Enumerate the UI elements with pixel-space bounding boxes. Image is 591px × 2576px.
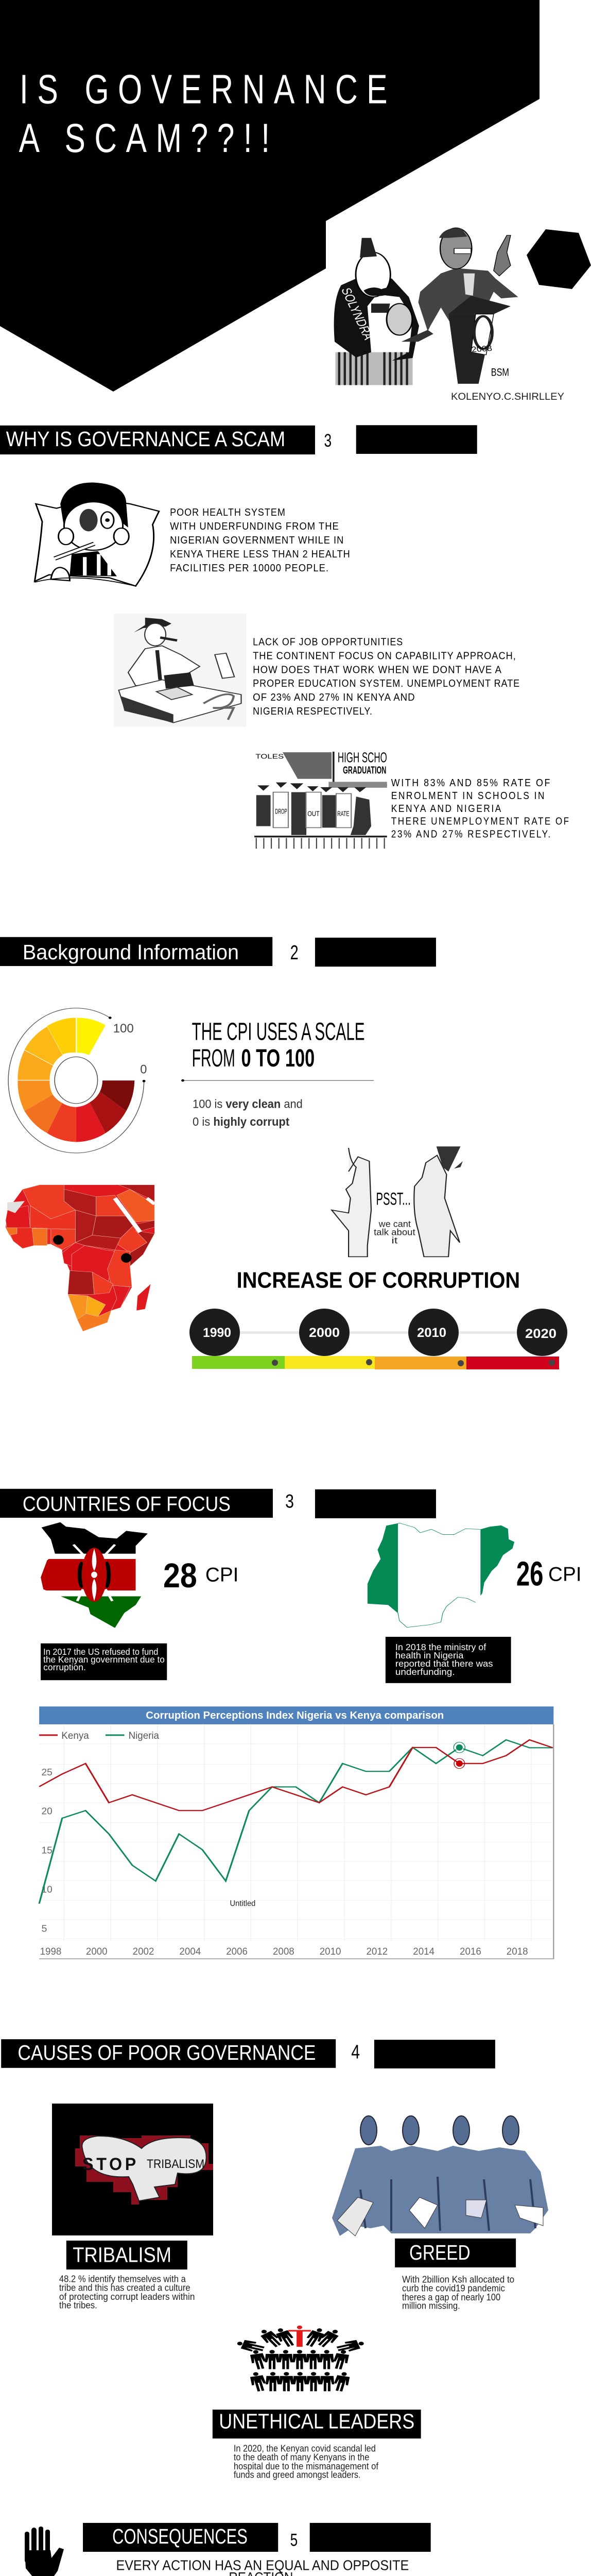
hero black banner [0, 0, 540, 392]
x axis labels: 1998 [40, 1946, 61, 1957]
x axis labels: 2006 [226, 1946, 248, 1957]
section: causes details [59, 2239, 516, 2576]
x axis labels: 2000 [86, 1946, 108, 1957]
x axis labels: 2002 [133, 1946, 154, 1957]
icon: graduation drop out rate cartoon: DROP [275, 808, 287, 816]
text: lack of job opportunities: NIGERIA RESPECTIVELY. [253, 706, 373, 717]
chart grid [39, 1724, 553, 1941]
text: scale explanation: 0 is highly corrupt [193, 1115, 289, 1128]
icon: whispering hands: talk about [374, 1228, 415, 1238]
section: background information [0, 937, 520, 1331]
text: unethical leaders [234, 2443, 378, 2480]
timeline circles: 2010 [417, 1326, 446, 1340]
label: unethical leaders [213, 2409, 421, 2438]
text: greed [402, 2274, 514, 2311]
icon: whispering hands: we cant [378, 1219, 411, 1229]
text: scale explanation: 100 is very clean and [193, 1097, 303, 1111]
title: A SCAM??!! [19, 115, 279, 161]
stat: Kenya CPI: CPI [205, 1564, 238, 1586]
text: poor health system [170, 506, 351, 574]
hero cartoon: corrupt handshake [334, 228, 518, 385]
chart: CPI scale donut: 100 [113, 1021, 134, 1035]
text: poor health system: NIGERIAN GOVERNMENT WHILE IN [170, 534, 344, 546]
label: tribalism: TRIBALISM [73, 2243, 171, 2266]
icon: graduation drop out rate cartoon: RATE [337, 810, 350, 818]
icon: stop hand [25, 2527, 64, 2576]
section heading bar [0, 1489, 436, 1518]
text: lack of job opportunities: OF 23% AND 27% IN KENYA AND [253, 692, 415, 703]
text: greed: theres a gap of nearly 100 [402, 2292, 500, 2302]
x axis labels [40, 1946, 528, 1957]
text: poor health system: KENYA THERE LESS THAN 2 HEALTH [170, 548, 351, 560]
chart markers [454, 1742, 465, 1769]
y axis labels: 5 [42, 1923, 47, 1934]
x axis labels: 2012 [367, 1946, 388, 1957]
chart: CPI scale donut [8, 1008, 147, 1153]
icon: graduation drop out rate cartoon [254, 749, 387, 849]
image: stop tribalism fist: TRIBALISM [147, 2157, 204, 2171]
line chart: CPI Nigeria vs Kenya [39, 1706, 553, 1959]
callout: Nigeria: In 2018 the ministry of [395, 1642, 486, 1652]
hero cartoon: corrupt handshake: BSM [491, 366, 509, 378]
section heading bar [0, 425, 477, 454]
title [19, 66, 396, 161]
text: unethical leaders: In 2020, the Kenyan covid scandal led [234, 2443, 376, 2454]
text: enrolment and unemployment [391, 777, 570, 840]
legend [39, 1730, 159, 1741]
timeline colour bars [192, 1356, 559, 1369]
text: tribalism: of protecting corrupt leaders within [59, 2291, 195, 2302]
icon: whispering hands: it [392, 1236, 398, 1246]
y axis labels: 10 [42, 1884, 53, 1895]
callout: Kenya: corruption. [43, 1662, 86, 1672]
timeline circles: 2020 [525, 1327, 557, 1341]
section heading: consequences: CONSEQUENCES [112, 2524, 248, 2548]
heading: CPI scale [181, 1018, 374, 1082]
image: stop tribalism fist [52, 2104, 213, 2235]
timeline circles [189, 1309, 567, 1356]
icon: graduation drop out rate cartoon: TOLES [255, 753, 284, 760]
icon: office worker at desk [114, 614, 246, 727]
chart frame [39, 1724, 553, 1959]
section heading bar: 3 [285, 1490, 294, 1512]
label: tribalism [66, 2241, 187, 2269]
line: Kenya [39, 1740, 553, 1810]
legend: Kenya [61, 1730, 89, 1741]
section heading: consequences [83, 2523, 431, 2552]
section heading bar: COUNTRIES OF FOCUS [23, 1493, 231, 1516]
y axis labels [42, 1767, 53, 1934]
image: stop tribalism fist: STOP [82, 2155, 139, 2174]
callout: Kenya [41, 1643, 167, 1680]
hero cartoon: corrupt handshake: 2008 [471, 344, 493, 354]
timeline: increase of corruption [189, 1309, 567, 1369]
text: lack of job opportunities [253, 636, 520, 717]
icon: sick child [34, 483, 159, 586]
text: poor health system: WITH UNDERFUNDING FROM THE [170, 520, 339, 532]
text: scale explanation [193, 1097, 303, 1128]
icon: whispering hands: PSST... [376, 1189, 411, 1209]
callout: Nigeria: underfunding. [395, 1667, 455, 1677]
text: lack of job opportunities: LACK OF JOB OPPORTUNITIES [253, 636, 403, 648]
section heading bar: Background Information [23, 940, 239, 964]
section heading bar [0, 937, 436, 967]
text: tribalism: tribe and this has created a culture [59, 2282, 190, 2293]
text: unethical leaders: to the death of many Kenyans in the [234, 2452, 369, 2463]
stat: Kenya CPI: 28 [163, 1557, 197, 1595]
text: unethical leaders: funds and greed amongst leaders. [234, 2469, 361, 2480]
text: poor health system: FACILITIES PER 10000 PEOPLE. [170, 562, 329, 574]
text: tribalism: 48.2 % identify themselves with a [59, 2274, 186, 2284]
stat: Nigeria CPI: 26 [516, 1555, 544, 1593]
heading: CPI scale: 0 TO 100 [241, 1044, 315, 1072]
x axis labels: 2016 [460, 1946, 481, 1957]
text: unethical leaders: hospital due to the mismanagement of [234, 2461, 378, 2471]
label: unethical leaders: UNETHICAL LEADERS [219, 2409, 414, 2433]
x axis labels: 2018 [507, 1946, 528, 1957]
image: greedy men passing money [332, 2116, 548, 2236]
x axis labels: 2008 [273, 1946, 294, 1957]
heading: CPI scale: THE CPI USES A SCALE [192, 1018, 365, 1045]
hero header [0, 0, 591, 402]
text: every action [96, 2557, 428, 2576]
black hexagon [527, 229, 591, 289]
callout: Nigeria [386, 1637, 511, 1683]
chart caption: Untitled [230, 1900, 255, 1908]
text: poor health system: POOR HEALTH SYSTEM [170, 506, 286, 518]
section: why is governance a scam: GRADUATION [343, 765, 386, 776]
label: greed: GREED [409, 2241, 471, 2264]
author credit: KOLENYO.C.SHIRLLEY [451, 392, 564, 402]
heading: CPI scale: FROM [192, 1044, 235, 1072]
timeline circles: 2000 [309, 1326, 340, 1340]
timeline connector [215, 1331, 544, 1334]
chart title band [39, 1706, 553, 1724]
section: countries of focus [0, 1489, 581, 1683]
map: Kenya flag [38, 1521, 151, 1629]
callout: Nigeria: health in Nigeria [395, 1651, 463, 1660]
text: greed: curb the covid19 pandemic [402, 2282, 505, 2293]
section heading bar: WHY IS GOVERNANCE A SCAM [6, 427, 285, 451]
text: greed: million missing. [402, 2300, 460, 2311]
chart: CPI scale donut: 0 [140, 1062, 147, 1076]
y axis labels: 20 [42, 1805, 53, 1816]
icon: leader above people [235, 2326, 366, 2392]
text: greed: With 2billion Ksh allocated to [402, 2274, 514, 2285]
callout: Nigeria: reported that there was [395, 1659, 493, 1669]
map: corruption across Africa [6, 1185, 154, 1331]
x axis labels: 2014 [413, 1946, 434, 1957]
section heading: consequences: 5 [290, 2530, 298, 2550]
x axis labels: 2010 [320, 1946, 341, 1957]
y axis labels: 25 [42, 1767, 53, 1777]
chart title band: Corruption Perceptions Index Nigeria vs Kenya comparison [146, 1709, 444, 1721]
text: tribalism: the tribes. [59, 2300, 97, 2311]
section heading bar: 3 [324, 431, 332, 451]
y axis labels: 15 [42, 1844, 53, 1855]
section: why is governance a scam [0, 425, 570, 849]
text: every action: EVERY ACTION HAS AN EQUAL AND OPPOSITE [116, 2557, 409, 2573]
x axis labels: 2004 [179, 1946, 201, 1957]
section heading: causes of poor governance: 4 [351, 2041, 360, 2062]
section: why is governance a scam: HIGH SCHO [338, 749, 387, 766]
section heading bar: 2 [290, 942, 299, 964]
icon: whispering hands [332, 1146, 463, 1257]
legend: Nigeria [129, 1730, 159, 1741]
section heading: causes of poor governance: CAUSES OF POOR GOVERNANCE [18, 2041, 316, 2064]
callout: Kenya: the Kenyan government due to [43, 1655, 165, 1665]
timeline circles: 1990 [203, 1326, 231, 1340]
map: Nigeria flag [366, 1521, 516, 1629]
callout: Kenya: In 2017 the US refused to fund [43, 1647, 158, 1657]
hero cartoon: corrupt handshake: SOLYNDRA [338, 286, 377, 342]
text: enrolment and unemployment: KENYA AND NIGERIA [391, 803, 502, 814]
line: Nigeria [39, 1740, 553, 1904]
icon: graduation drop out rate cartoon: OUT [307, 810, 320, 818]
text: tribalism [59, 2274, 195, 2311]
